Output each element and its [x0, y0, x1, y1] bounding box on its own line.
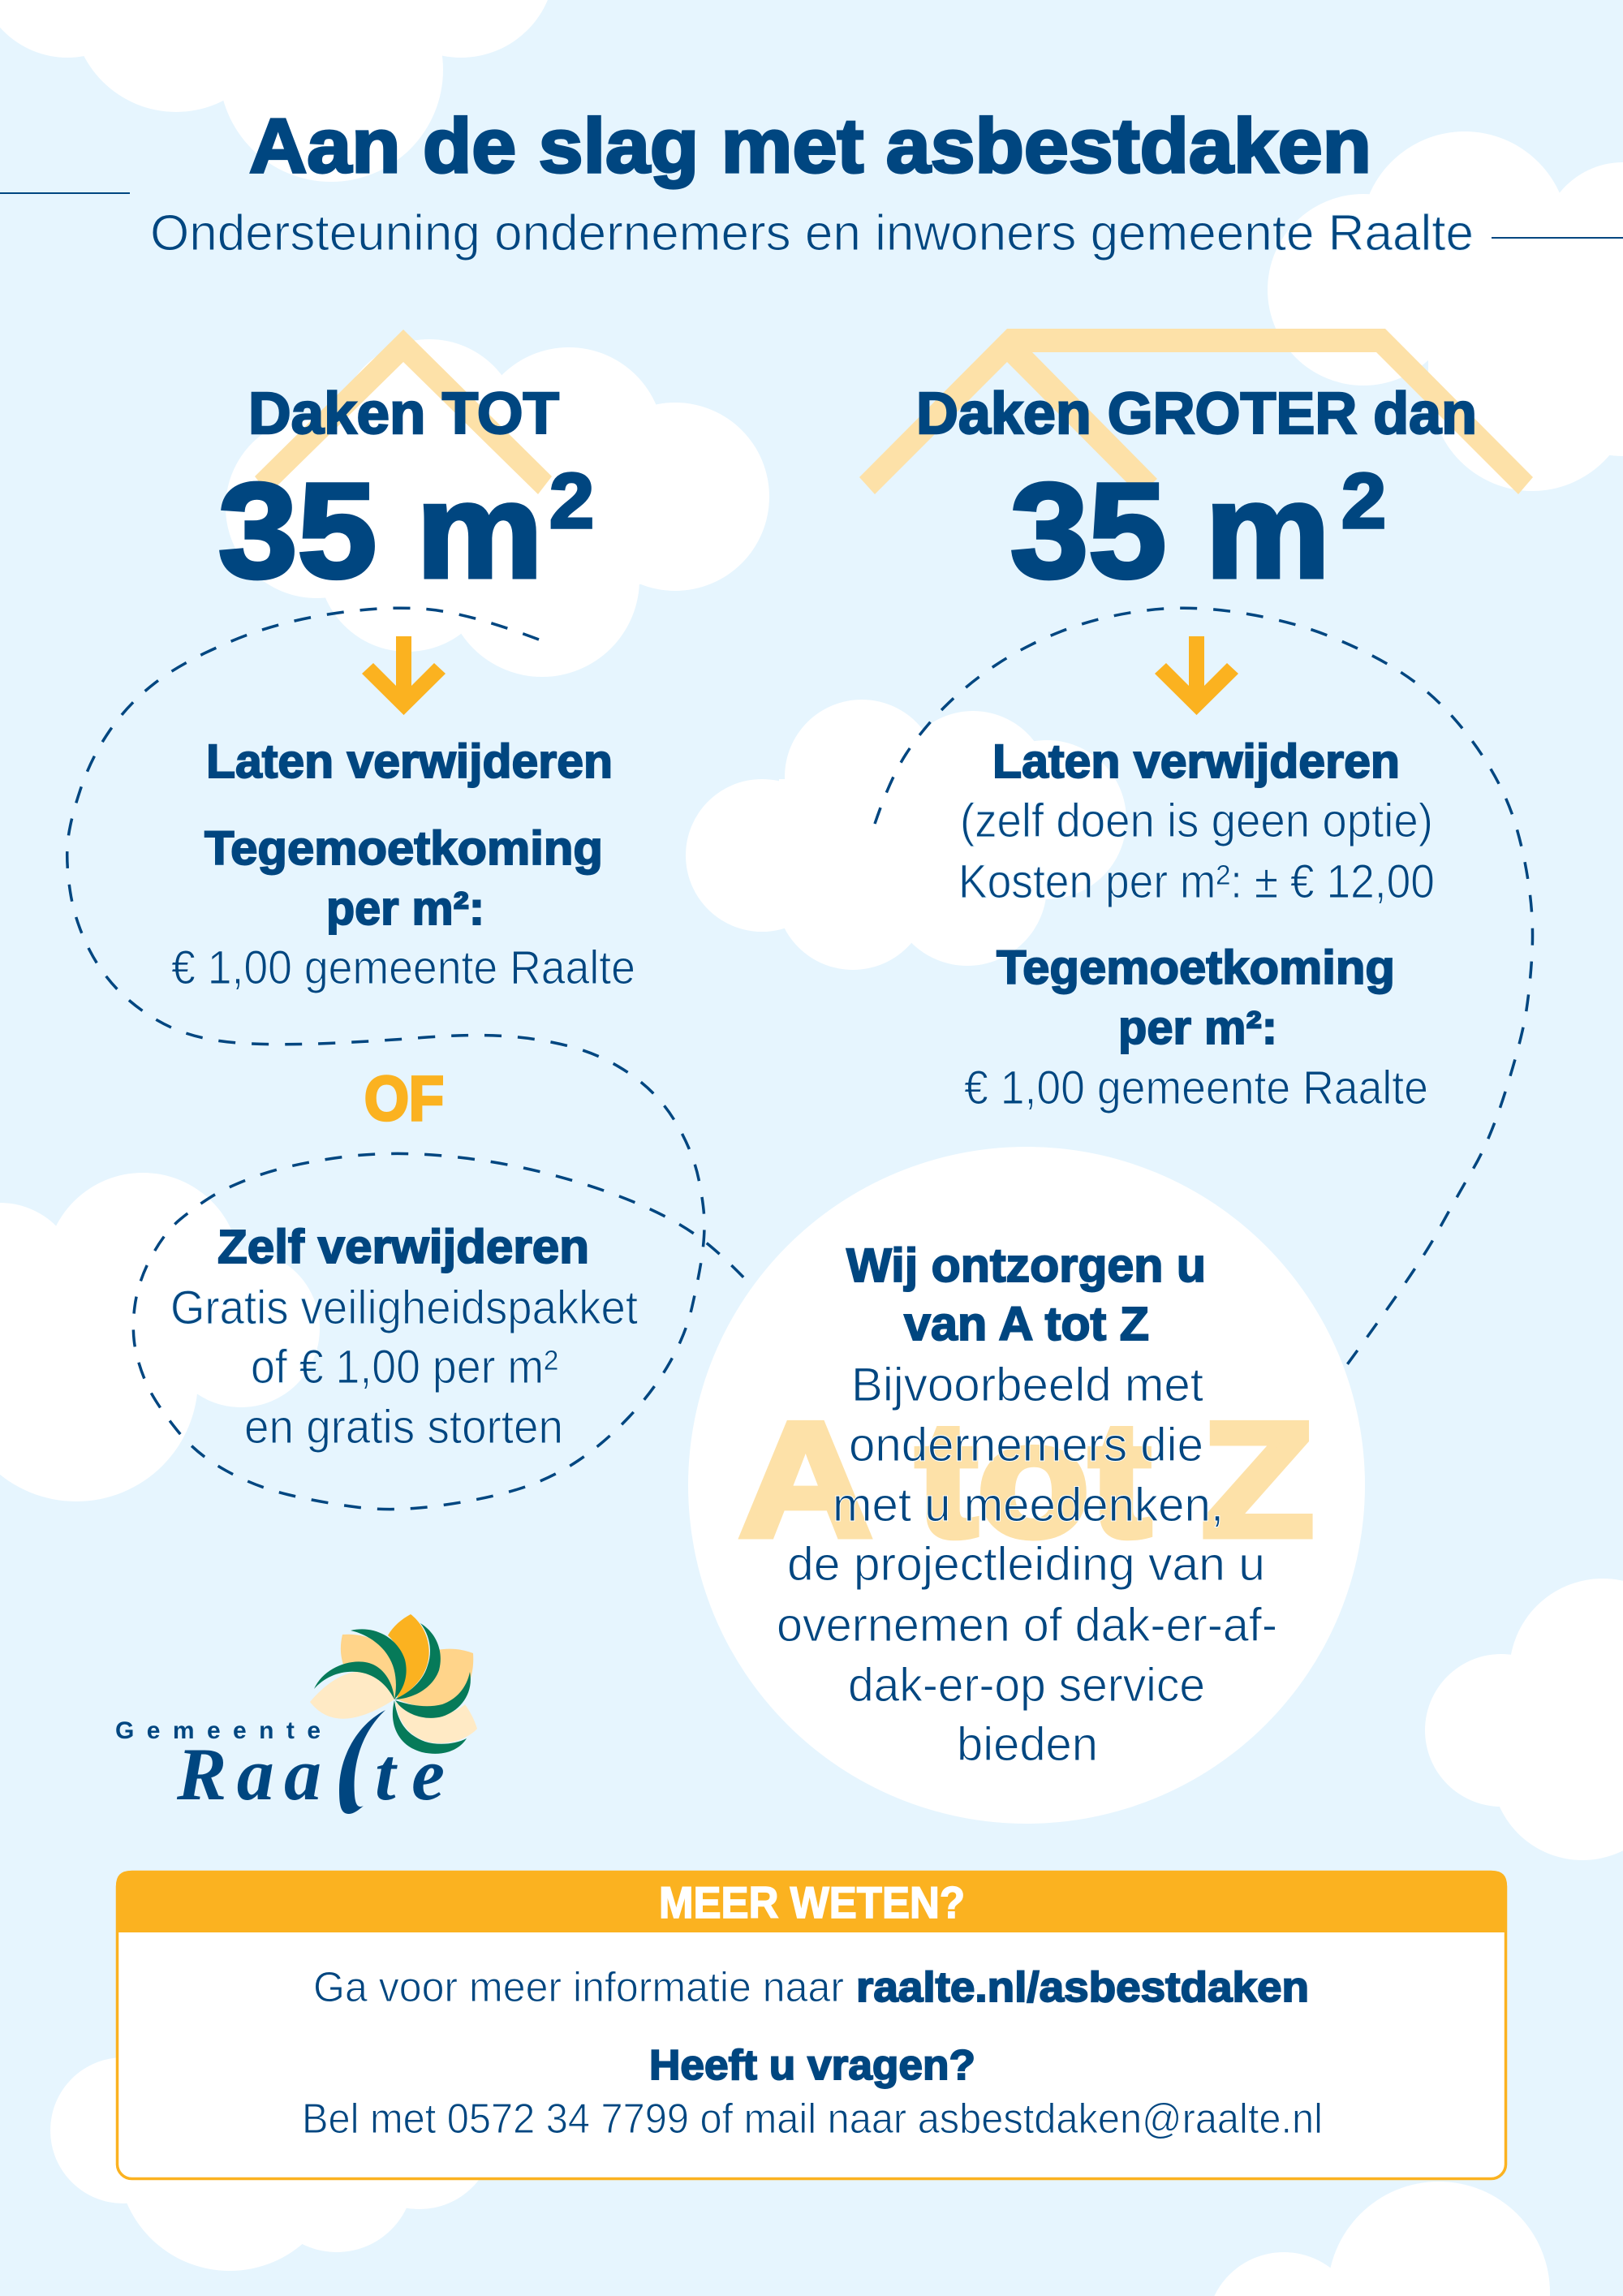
cloud: bottom right of circle — [1425, 1579, 1623, 1860]
watermark: a tot z: A tot Z — [739, 1389, 1314, 1570]
icon: arrow down — [1155, 636, 1238, 715]
text: tegemoetkoming — [997, 941, 1395, 1054]
text: toelichting: met u meedenken, — [833, 1479, 1224, 1531]
cloud: left — [0, 1173, 320, 1501]
heading: meer weten: MEER WETEN? — [659, 1877, 965, 1928]
icon: arrow down — [362, 636, 446, 715]
icon: small roof — [255, 330, 552, 494]
text: tegemoetkoming: per m²: — [1118, 1002, 1277, 1054]
panel: meer weten — [116, 1871, 1507, 2178]
heading: zelf verwijderen: Zelf verwijderen — [217, 1221, 589, 1273]
logo stem — [339, 1710, 385, 1814]
panel: zelf verwijderen — [170, 1221, 638, 1454]
logo petals — [310, 1614, 477, 1743]
text: toelichting: ondernemers die — [849, 1419, 1203, 1471]
heading: daken groter dan: Daken GROTER dan — [916, 381, 1477, 446]
heading: wij ontzorgen u: van A tot Z — [904, 1298, 1149, 1350]
text: toelichting: de projectleiding van u — [787, 1538, 1265, 1591]
logo text: raalte: te — [375, 1733, 445, 1816]
text: laten verwijderen: Laten verwijderen — [992, 735, 1400, 788]
heading: daken tot: Daken TOT — [248, 381, 559, 446]
title: Aan de slag met asbestdaken — [249, 103, 1371, 189]
text: meer informatie: Ga voor meer informatie naar — [313, 1964, 844, 2011]
logo text: raalte: Raa — [176, 1733, 321, 1816]
heading: heeft u vragen: Heeft u vragen? — [649, 2042, 975, 2089]
text: toelichting: dak-er-op service — [848, 1659, 1205, 1712]
header bar — [116, 1871, 1507, 1932]
text: meer informatie: raalte.nl/asbestdaken — [856, 1964, 1309, 2011]
dashed route: right — [875, 608, 1533, 1376]
panel: daken groter dan 35 m2 — [916, 381, 1477, 1114]
text: toelichting: Bijvoorbeeld met — [851, 1359, 1203, 1411]
cloud: bottom left — [50, 2047, 494, 2271]
icon: large roof — [859, 329, 1533, 495]
text: zelf verwijderen details: Gratis veiligheidspakket — [170, 1282, 638, 1334]
logo text: raalte — [176, 1733, 445, 1816]
logo text: gemeente: Gemeente — [115, 1717, 321, 1744]
text: zelf verwijderen details — [170, 1282, 638, 1454]
panel: a tot z circle — [688, 1147, 1365, 1824]
subtitle: Ondersteuning ondernemers en inwoners gemeente Raalte — [150, 205, 1474, 261]
text: toelichting — [777, 1359, 1277, 1771]
text: laten verwijderen: Laten verwijderen — [206, 735, 613, 788]
dashed route: left — [67, 608, 771, 1510]
panel: daken tot 35 m2 — [171, 381, 635, 994]
text: tegemoetkoming: per m²: — [326, 882, 484, 935]
text: toelichting: overnemen of dak-er-af- — [777, 1599, 1277, 1652]
heading: wij ontzorgen u — [846, 1239, 1206, 1350]
text: toelichting: bieden — [957, 1718, 1098, 1771]
text: of: OF — [364, 1064, 444, 1134]
cloud: top right — [1268, 131, 1623, 491]
text: contact: Bel met 0572 34 7799 of mail naar asbestdaken@raalte.nl — [302, 2096, 1323, 2143]
heading: 35 m2: 35 m — [1010, 456, 1330, 606]
text: tegemoetkoming — [204, 822, 603, 935]
text: bedrag: € 1,00 gemeente Raalte — [171, 941, 635, 994]
text: meer informatie — [313, 1964, 1309, 2011]
text: kosten: (zelf doen is geen optie) — [960, 795, 1433, 847]
text: kosten — [958, 795, 1435, 908]
text: tegemoetkoming: Tegemoetkoming — [997, 941, 1395, 994]
text: bedrag: € 1,00 gemeente Raalte — [964, 1062, 1428, 1114]
text: tegemoetkoming: Tegemoetkoming — [204, 822, 603, 875]
cloud: bottom right — [1207, 2182, 1550, 2296]
text: kosten: Kosten per m²: ± € 12,00 — [958, 855, 1435, 908]
cloud: top left — [0, 0, 555, 182]
heading: 35 m2: 35 m — [218, 456, 543, 606]
logo green arcs — [314, 1623, 471, 1754]
cloud: middle — [686, 700, 1126, 970]
heading: wij ontzorgen u: Wij ontzorgen u — [846, 1239, 1206, 1292]
heading: 35 m2: 2 — [1341, 458, 1386, 545]
text: zelf verwijderen details: en gratis storten — [244, 1401, 563, 1454]
logo: gemeente raalte — [115, 1614, 477, 1816]
cloud: behind left heading — [226, 339, 769, 677]
heading: 35 m2: 2 — [549, 458, 594, 545]
text: zelf verwijderen details: of € 1,00 per m² — [251, 1341, 558, 1394]
